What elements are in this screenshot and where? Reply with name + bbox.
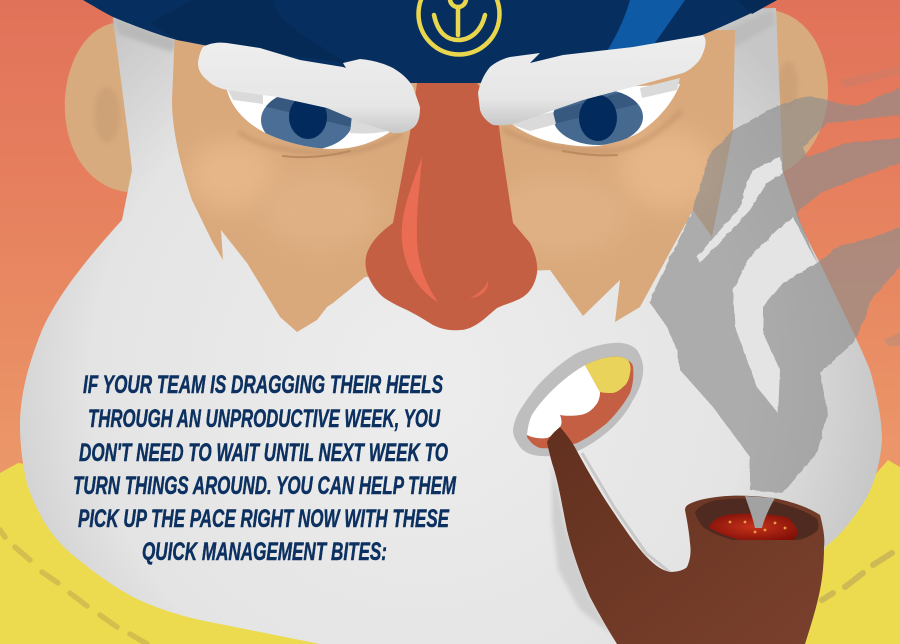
pipe	[547, 427, 824, 644]
left ear	[65, 23, 180, 192]
intro text: DON'T NEED TO WAIT UNTIL NEXT WEEK TO	[79, 439, 448, 467]
intro text: TURN THINGS AROUND. YOU CAN HELP THEM	[73, 472, 457, 500]
right eye	[505, 78, 680, 146]
captain hat	[83, 0, 777, 83]
intro text: QUICK MANAGEMENT BITES:	[142, 538, 387, 566]
intro text: PICK UP THE PACE RIGHT NOW WITH THESE	[78, 505, 450, 533]
beard strip top shadows	[113, 17, 177, 52]
embers	[708, 514, 798, 540]
pipe bowl opening	[695, 498, 818, 540]
intro text	[73, 371, 457, 566]
beard showing through smoke	[697, 157, 817, 413]
smoke	[650, 88, 900, 493]
teeth	[527, 365, 600, 438]
faint smoke wisps	[840, 66, 900, 346]
left eye	[227, 90, 390, 149]
bowl smoke wisp	[745, 496, 775, 528]
left eyebrow	[198, 43, 420, 133]
mouth	[513, 343, 643, 456]
right ear	[740, 10, 828, 172]
sweater	[0, 460, 900, 644]
face skin	[160, 20, 750, 340]
nose	[366, 83, 537, 330]
right eyebrow	[478, 35, 706, 125]
intro text: IF YOUR TEAM IS DRAGGING THEIR HEELS	[83, 371, 443, 399]
gold tooth	[585, 357, 631, 393]
eye shadow creases	[240, 112, 680, 157]
icon: anchor emblem	[418, 0, 500, 54]
intro text: THROUGH AN UNPRODUCTIVE WEEK, YOU	[88, 405, 441, 433]
